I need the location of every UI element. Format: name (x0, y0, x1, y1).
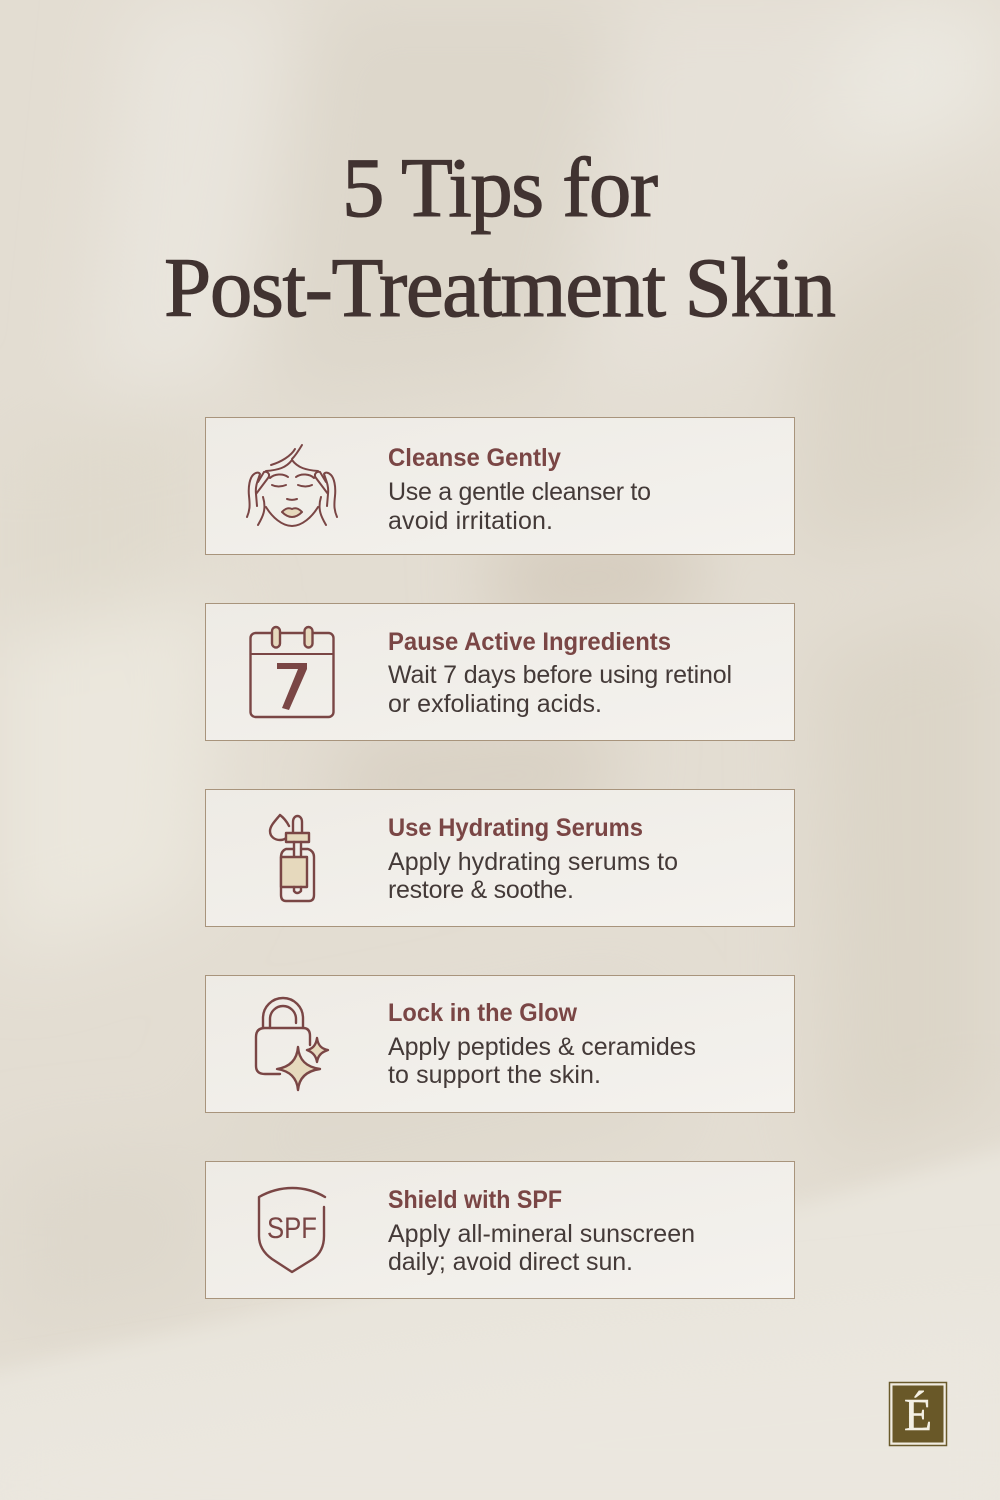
body text: daily; avoid direct sun. (388, 1248, 633, 1276)
body text: Apply peptides & ceramides (388, 1033, 696, 1061)
body text: Use a gentle cleanser to (388, 478, 651, 506)
body text (388, 848, 678, 904)
panel: pause active ingredients (206, 604, 794, 740)
logo (890, 1382, 946, 1446)
heading: Use Hydrating Serums (388, 814, 643, 842)
body text (388, 1033, 696, 1089)
body text: Wait 7 days before using retinol (388, 661, 732, 689)
title: Post-Treatment Skin (164, 241, 836, 335)
icon: calendar (250, 627, 334, 717)
body text: or exfoliating acids. (388, 690, 602, 718)
icon: SPF shield (259, 1188, 325, 1272)
body text: avoid irritation. (388, 507, 553, 535)
body text (388, 661, 732, 718)
heading: Pause Active Ingredients (388, 628, 671, 656)
body text (388, 1220, 695, 1276)
heading: Shield with SPF (388, 1186, 562, 1214)
icon: dropper bottle (270, 815, 314, 901)
panel: cleanse gently (206, 418, 794, 554)
title: 5 Tips for (342, 141, 658, 235)
panel: shield with spf (206, 1162, 794, 1298)
heading: Lock in the Glow (388, 999, 578, 1027)
body text: Apply all-mineral sunscreen (388, 1220, 695, 1248)
body text: restore & soothe. (388, 876, 574, 904)
body text: Apply hydrating serums to (388, 848, 678, 876)
logo: É (904, 1389, 932, 1440)
icon: padlock with sparkles (256, 998, 328, 1090)
panel: use hydrating serums (206, 790, 794, 926)
title (164, 141, 836, 335)
panel: lock in the glow (206, 976, 794, 1112)
heading: Cleanse Gently (388, 444, 561, 472)
body text: to support the skin. (388, 1061, 601, 1089)
icon: face with hands (247, 445, 337, 526)
body text (388, 478, 651, 535)
icon: SPF shield: SPF (267, 1212, 317, 1245)
